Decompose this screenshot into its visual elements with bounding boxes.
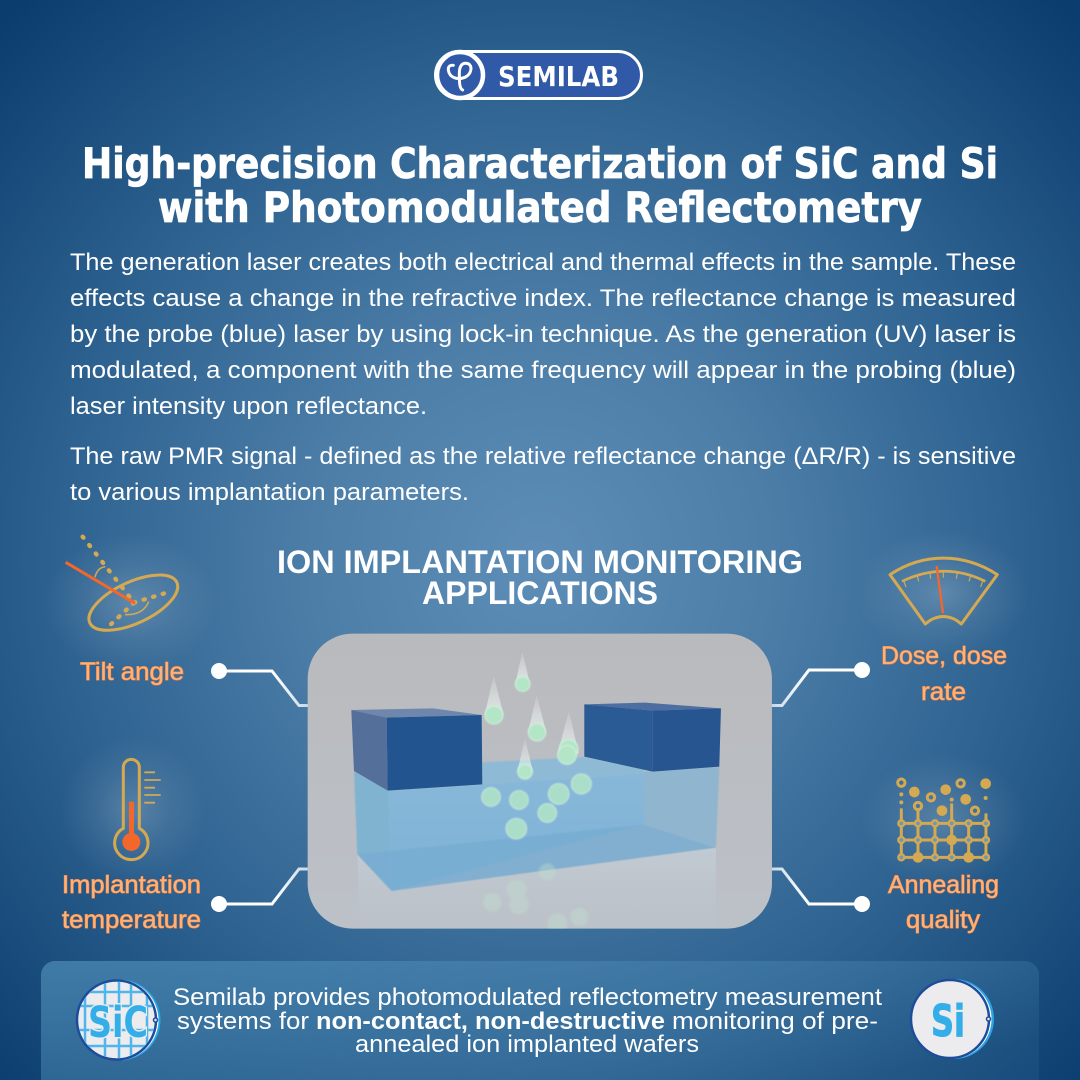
connector: implantation temperature xyxy=(211,869,310,912)
panel: ion implantation illustration xyxy=(308,634,772,933)
footer text: Semilab provides photomodulated reflectometry measurement xyxy=(173,984,882,1011)
label: dose, dose rate: Dose, dose xyxy=(881,642,1007,670)
section heading xyxy=(277,544,803,611)
label: implantation temperature: temperature xyxy=(62,906,201,934)
ions xyxy=(482,652,591,933)
icon: annealing lattice xyxy=(860,753,1027,887)
footer text: systems for xyxy=(177,1008,309,1035)
footer text xyxy=(173,984,882,1058)
substrate xyxy=(354,757,719,891)
title xyxy=(82,139,998,232)
icon: Si wafer: Si xyxy=(931,996,965,1047)
title: with Photomodulated Reflectometry xyxy=(158,183,922,232)
icon: dose gauge xyxy=(857,530,1030,657)
section heading: ION IMPLANTATION MONITORING xyxy=(277,544,803,580)
footer text: monitoring of pre- xyxy=(672,1008,878,1035)
PMR signal paragraph: The raw PMR signal - defined as the relative reflectance change (ΔR/R) - is sensitive xyxy=(70,443,1016,470)
PMR signal paragraph: to various implantation parameters. xyxy=(70,479,469,506)
section heading: APPLICATIONS xyxy=(422,575,658,611)
footer text: annealed ion implanted wafers xyxy=(355,1031,699,1058)
intro paragraph: by the probe (blue) laser by using lock-in technique. As the generation (UV) laser is xyxy=(70,321,1016,348)
label: tilt angle: Tilt angle xyxy=(80,658,184,686)
footer text: non-contact, non-destructive xyxy=(316,1008,665,1035)
connector: annealing quality xyxy=(770,869,870,912)
label: annealing quality: quality xyxy=(906,906,981,934)
icon: tilt angle xyxy=(43,533,217,673)
logo: Semilab: SEMILAB xyxy=(498,60,619,93)
connector: dose xyxy=(770,662,870,706)
label: dose, dose rate xyxy=(881,642,1007,706)
left mask block xyxy=(351,708,482,791)
right mask block xyxy=(584,703,721,772)
label: annealing quality xyxy=(888,871,999,934)
floor reflection xyxy=(358,848,716,876)
connector: tilt angle xyxy=(211,663,310,706)
icon: SiC wafer: SiC xyxy=(88,998,148,1048)
logo: Semilab xyxy=(436,52,642,98)
label: implantation temperature xyxy=(62,871,201,934)
label: annealing quality: Annealing xyxy=(888,871,999,899)
label: implantation temperature: Implantation xyxy=(62,871,201,899)
intro paragraph xyxy=(70,249,1016,420)
icon: Si wafer xyxy=(911,979,994,1059)
icon: SiC wafer xyxy=(76,979,160,1061)
intro paragraph: The generation laser creates both electrical and thermal effects in the sample. These xyxy=(70,249,1016,276)
intro paragraph: laser intensity upon reflectance. xyxy=(70,393,427,420)
intro paragraph: effects cause a change in the refractive index. The reflectance change is measured xyxy=(70,285,1016,312)
panel: footer xyxy=(41,961,1039,1080)
label: dose, dose rate: rate xyxy=(921,678,966,706)
intro paragraph: modulated, a component with the same frequency will appear in the probing (blue) xyxy=(70,357,1016,384)
PMR signal paragraph xyxy=(70,443,1016,506)
icon: thermometer xyxy=(60,737,207,883)
